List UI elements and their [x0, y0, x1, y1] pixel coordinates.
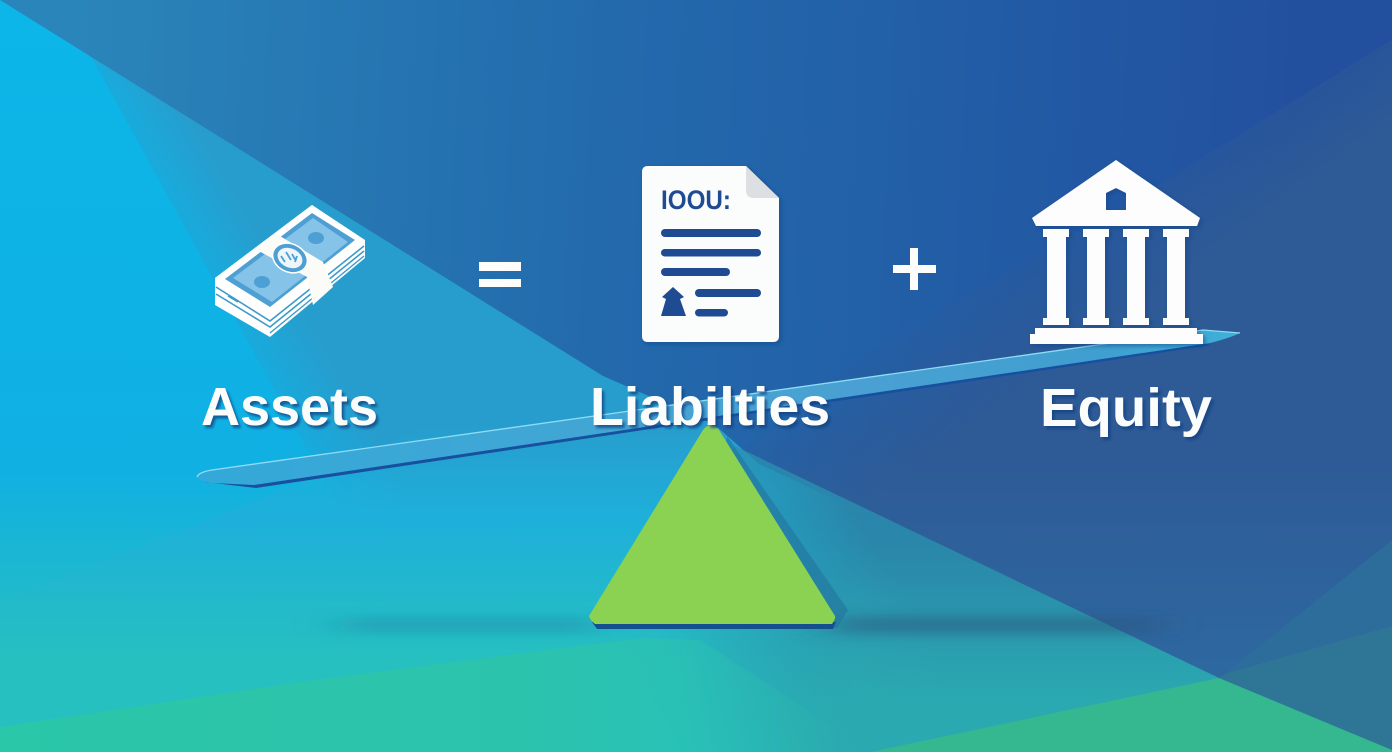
icon: IOU document	[642, 166, 779, 342]
fulcrum triangle	[589, 425, 848, 629]
equals sign	[479, 262, 521, 287]
plus sign	[893, 248, 936, 290]
icon: stack of banknotes	[215, 205, 365, 337]
ground shadow of the fulcrum	[340, 616, 1160, 634]
label: Assets: Assets	[201, 377, 378, 437]
label: Liabilities: Liabilties	[590, 377, 830, 437]
document heading: IOOU:	[661, 185, 731, 215]
seesaw beam	[197, 330, 1240, 488]
icon: bank building	[1030, 160, 1203, 344]
label: Equity: Equity	[1040, 378, 1212, 438]
